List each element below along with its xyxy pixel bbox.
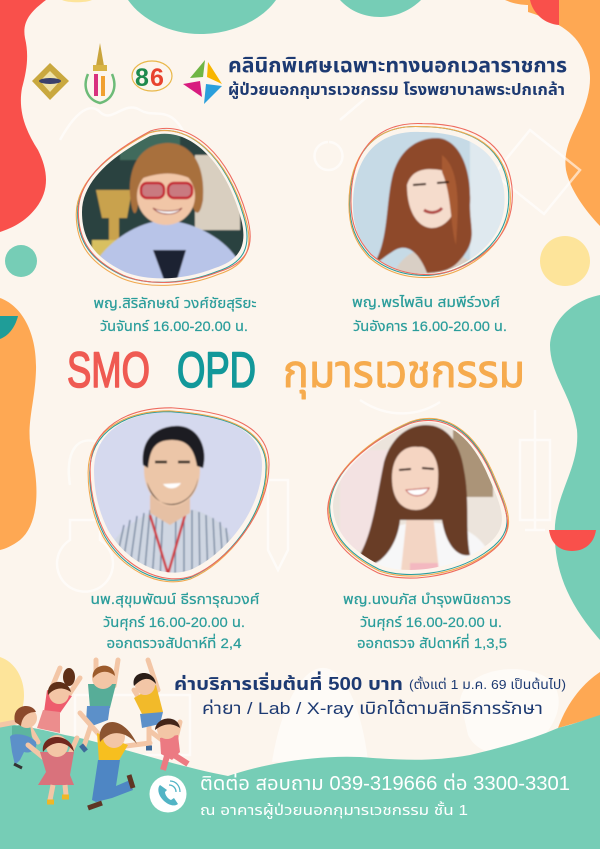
- title: SMO OPD paediatrics: กุมารเวชกรรม: [283, 345, 525, 399]
- title: SMO OPD paediatrics: OPD: [177, 342, 256, 398]
- child: girl in rose dress: [28, 735, 77, 802]
- fee line: (ตั้งแต่ 1 ม.ค. 69 เป็นต้นไป): [409, 676, 566, 692]
- contact phone number: ติดต่อ สอบถาม 039-319666 ต่อ 3300-3301: [200, 772, 570, 795]
- portrait rings: doctor 2: [349, 123, 512, 278]
- child: boy far left: [0, 706, 38, 768]
- logo: four-colour star: [183, 60, 222, 104]
- portrait: doctor 3: [94, 412, 262, 573]
- child: girl with pink top left: [37, 668, 80, 733]
- doctor 4 details: พญ.นงนภัส บำรุงพนิชถาวร: [343, 591, 511, 608]
- doctor 1 details: [94, 295, 257, 334]
- doctor 4 details: [343, 591, 511, 651]
- portrait: doctor 2: [353, 132, 504, 274]
- title: SMO OPD paediatrics: [67, 342, 525, 399]
- coverage note: ค่ายา / Lab / X-ray เบิกได้ตามสิทธิการรักษา: [202, 698, 543, 718]
- child: boy in yellow top: [134, 660, 163, 748]
- doctor 3 details: วันศุกร์ 16.00-20.00 น.: [103, 614, 245, 631]
- doctor 4 details: วันศุกร์ 16.00-20.00 น.: [360, 614, 502, 631]
- doctor 1 details: พญ.สิริลักษณ์ วงศ์ชัยสุริยะ: [94, 295, 257, 312]
- faint white hills behind fee text: [272, 668, 559, 762]
- doctor 2 details: วันอังคาร 16.00-20.00 น.: [353, 318, 507, 334]
- green footer wave: [0, 715, 600, 849]
- icon: phone: [150, 776, 186, 812]
- doctor 4 details: ออกตรวจ สัปดาห์ที่ 1,3,5: [357, 633, 507, 651]
- clinic location: ณ อาคารผู้ป่วยนอกกุมารเวชกรรม ชั้น 1: [200, 801, 468, 819]
- title: SMO OPD paediatrics: SMO: [67, 342, 150, 398]
- illustration: jumping children: [0, 660, 188, 808]
- doctor 3 details: นพ.สุขุมพัฒน์ ธีรการุณวงศ์: [90, 591, 260, 608]
- child: boy in green top: [81, 660, 118, 751]
- heading: department and hospital: ผู้ป่วยนอกกุมารเวชกรรม โรงพยาบาลพระปกเกล้า: [228, 81, 565, 100]
- doctor 2 details: พญ.พรไพลิน สมพีร์วงศ์: [352, 294, 500, 310]
- portrait: doctor 1: [82, 134, 244, 278]
- portrait rings: doctor 4: [328, 419, 509, 578]
- doctor 3 details: [90, 591, 260, 651]
- fee line: ค่าบริการเริ่มต้นที่ 500 บาท: [174, 671, 403, 694]
- doctor 3 details: ออกตรวจสัปดาห์ที่ 2,4: [106, 633, 242, 651]
- faint medical line-art watermark: [57, 96, 580, 755]
- portrait rings: doctor 3: [88, 408, 269, 582]
- logo: 86 anniversary: 8: [135, 64, 149, 92]
- logo: gold emblem: [32, 63, 69, 100]
- logo: 86 anniversary: [132, 61, 172, 92]
- heading: clinic name: คลินิกพิเศษเฉพาะทางนอกเวลาราชการ: [228, 55, 567, 77]
- doctor 1 details: วันจันทร์ 16.00-20.00 น.: [100, 318, 248, 334]
- doctor 2 details: [352, 294, 507, 334]
- portrait: doctor 4: [333, 422, 502, 570]
- child: girl jumping in yellow centre: [80, 713, 150, 808]
- portrait rings: doctor 1: [76, 128, 250, 285]
- logo: 86 anniversary: 6: [150, 64, 164, 92]
- logo: royal crest: [86, 43, 114, 103]
- fee line: [174, 671, 566, 694]
- child: girl in pink far right: [150, 718, 188, 770]
